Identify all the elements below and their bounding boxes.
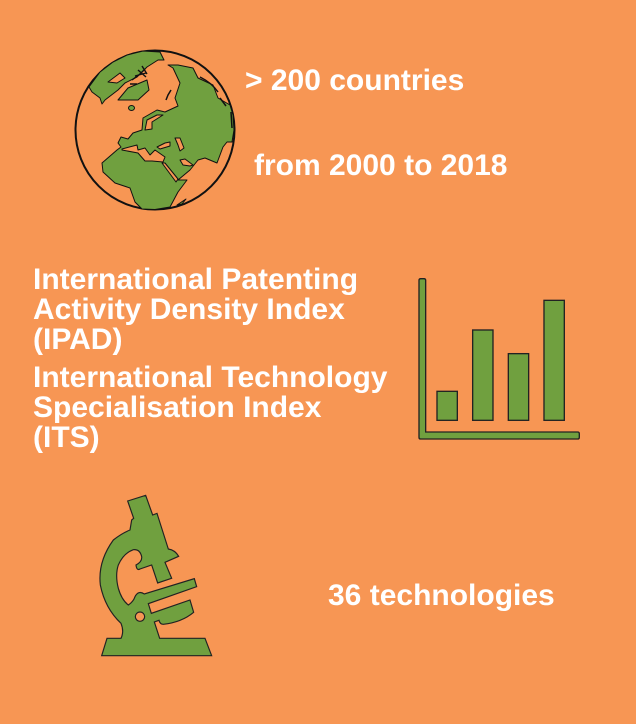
text: ITS index: International Technology — [33, 361, 387, 394]
icon: microscope — [100, 495, 212, 656]
sea: Persian Gulf — [180, 159, 193, 166]
land: north-west landmass — [89, 51, 164, 104]
sea: Caspian — [175, 138, 184, 151]
land: Madagascar — [177, 199, 186, 205]
land: northern island — [118, 80, 149, 100]
text: period: from 2000 to 2018 — [254, 149, 507, 182]
text: IPAD index: (IPAD) — [33, 323, 122, 356]
text: IPAD index — [33, 263, 358, 356]
bar 4 — [544, 300, 564, 420]
chart axes — [419, 279, 579, 439]
sea: Mediterranean — [122, 145, 165, 162]
sea: Black Sea — [157, 142, 170, 149]
text: IPAD index: International Patenting — [33, 263, 358, 296]
text: ITS index: Specialisation Index — [33, 391, 321, 424]
text: technologies: 36 technologies — [328, 579, 555, 612]
icon: bar chart — [419, 279, 579, 439]
icon: globe — [76, 50, 234, 210]
sea: Red Sea — [162, 163, 178, 182]
bar 2 — [473, 330, 493, 420]
land: archipelago detail — [130, 66, 147, 84]
bar 1 — [437, 391, 457, 420]
land: Eurasia and Africa — [102, 65, 234, 210]
text: ITS index: (ITS) — [33, 421, 100, 454]
sea: Baltic — [145, 115, 163, 130]
text: IPAD index: Activity Density Index — [33, 293, 345, 326]
text: ITS index — [33, 361, 388, 454]
land: small island — [128, 106, 134, 110]
text: countries: > 200 countries — [245, 64, 464, 97]
bar 3 — [508, 354, 529, 420]
sea: inner bay — [108, 73, 125, 83]
land: eastern coast detail — [166, 77, 232, 128]
